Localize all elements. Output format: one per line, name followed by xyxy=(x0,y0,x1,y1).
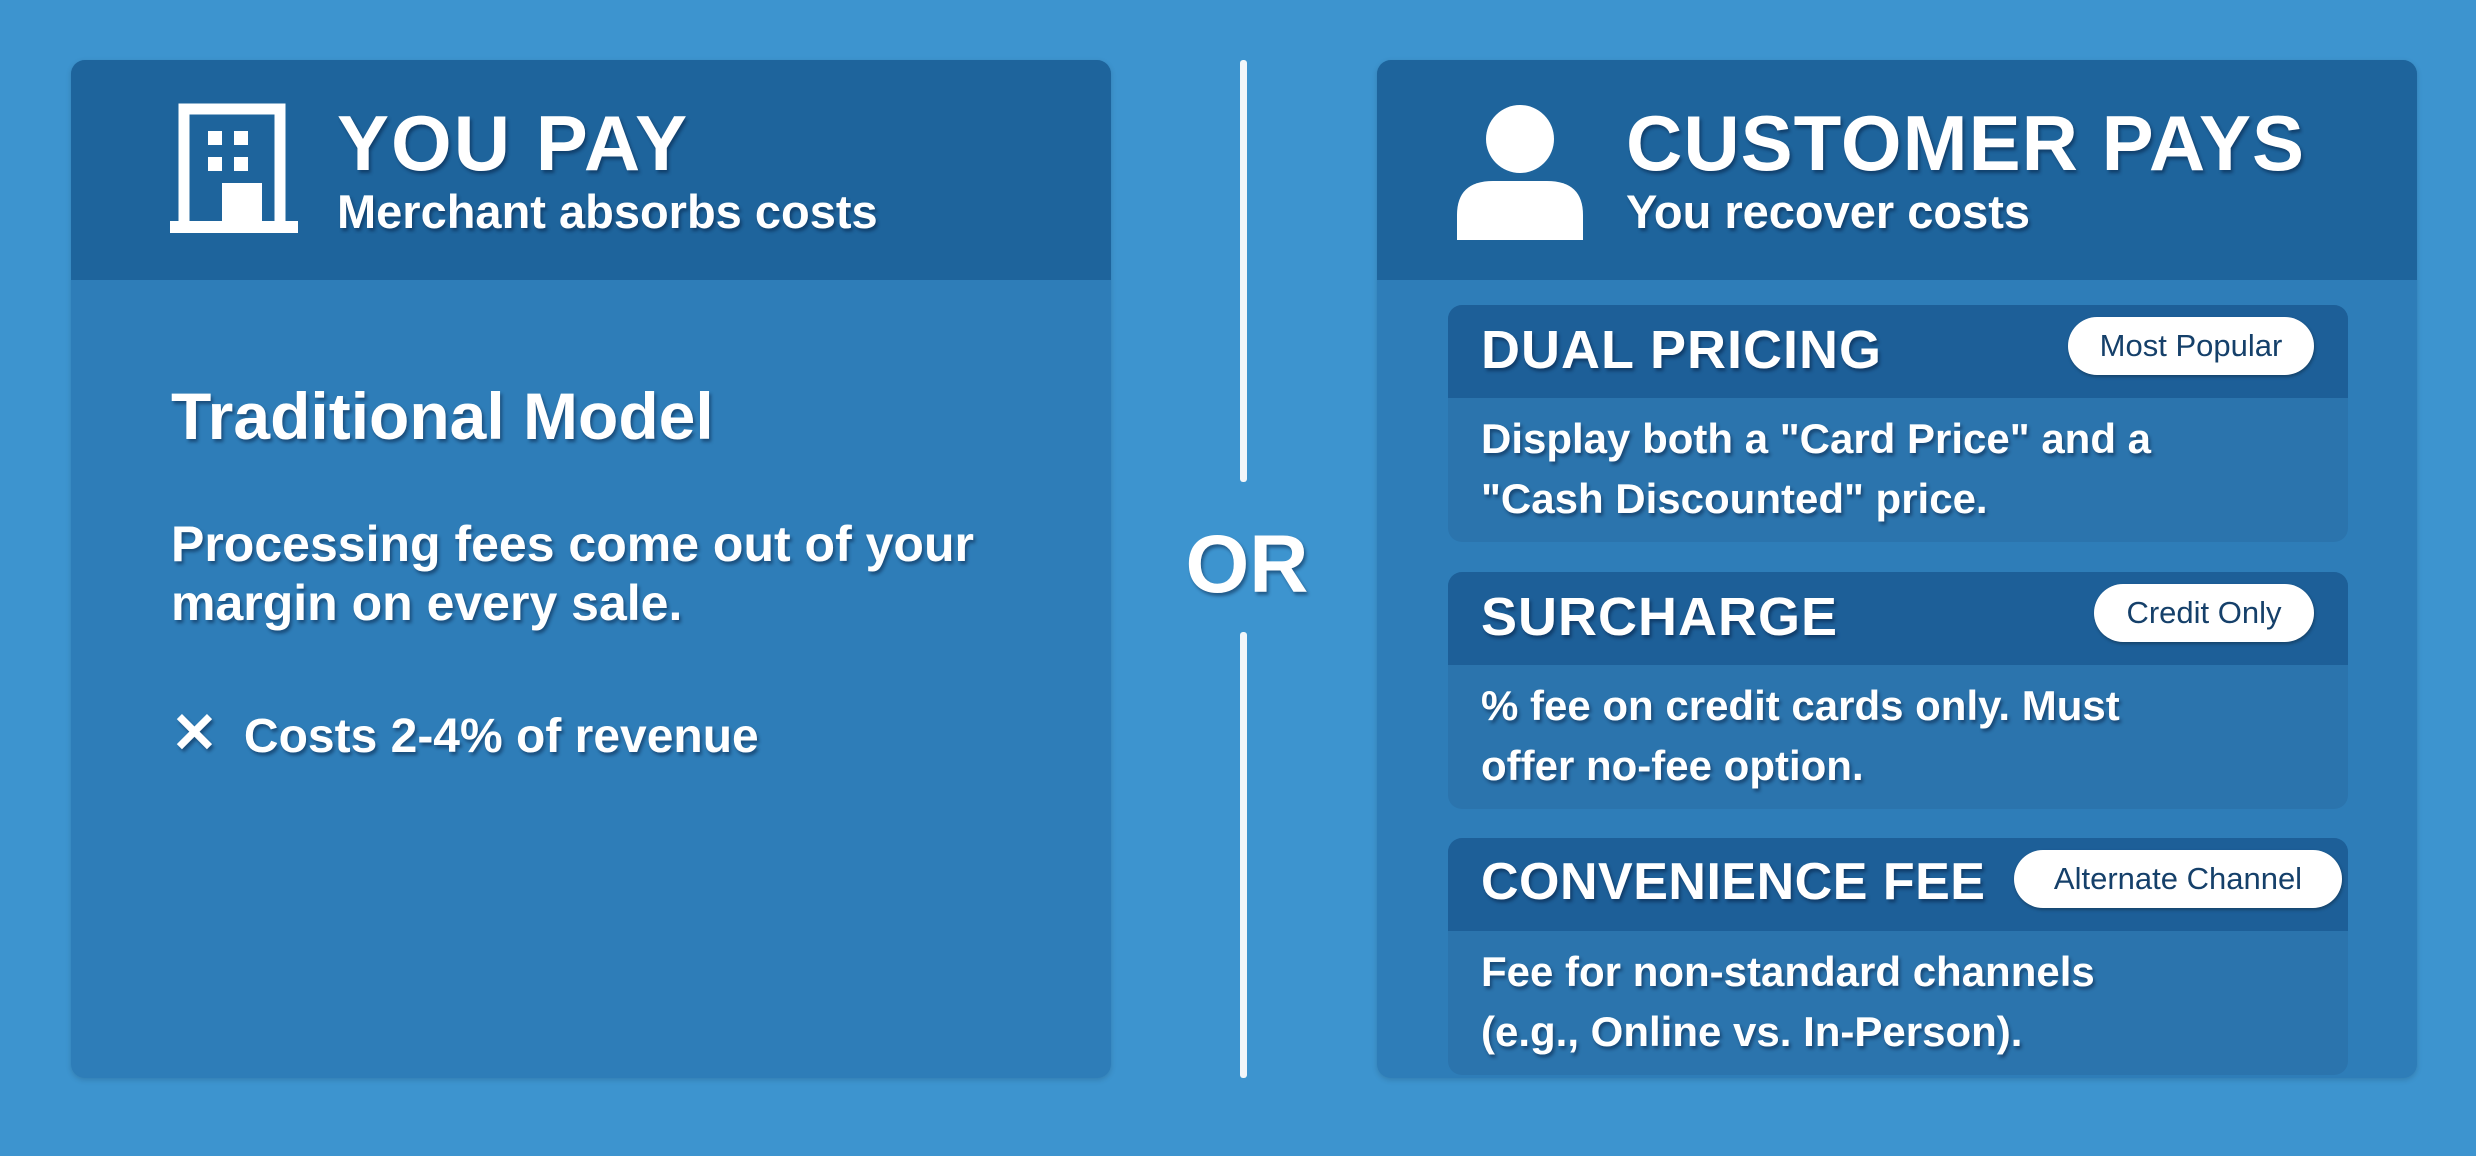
text: description: Processing fees come out of your xyxy=(171,516,974,572)
card text: Fee for non-standard channels xyxy=(1481,948,2095,995)
card text xyxy=(1481,415,2154,526)
card: surcharge xyxy=(1448,572,2348,809)
header: you pay xyxy=(71,60,1111,280)
badge: alternate channel: Alternate Channel xyxy=(2054,861,2302,896)
card title: SURCHARGE xyxy=(1481,587,1838,647)
subtitle: Merchant absorbs costs xyxy=(337,185,878,238)
header: customer pays xyxy=(1377,60,2417,280)
OR label: OR xyxy=(1186,519,1308,610)
card text: (e.g., Online vs. In-Person). xyxy=(1481,1008,2022,1055)
title: you pay: YOU PAY xyxy=(337,99,689,187)
text: cost note with x icon: ✕ Costs 2-4% of revenue xyxy=(171,701,759,764)
card: convenience fee xyxy=(1448,838,2348,1075)
panel: customer pays xyxy=(1377,60,2417,1078)
divider line top xyxy=(1240,60,1247,482)
title: customer pays: CUSTOMER PAYS xyxy=(1626,99,2305,187)
badge: alternate channel xyxy=(2014,850,2342,908)
card text: "Cash Discounted" price. xyxy=(1481,475,1988,522)
card text xyxy=(1481,948,2096,1059)
badge: credit only xyxy=(2094,584,2314,642)
icon: person xyxy=(1457,105,1583,240)
heading: traditional model: Traditional Model xyxy=(171,379,714,453)
badge: most popular: Most Popular xyxy=(2100,328,2282,363)
divider line bottom xyxy=(1240,632,1247,1078)
card title: CONVENIENCE FEE xyxy=(1481,853,1985,911)
subtitle: You recover costs xyxy=(1626,185,2030,238)
card: dual pricing xyxy=(1448,305,2348,542)
card text: % fee on credit cards only. Must xyxy=(1481,682,2120,729)
text: description: margin on every sale. xyxy=(171,575,682,631)
card text: offer no-fee option. xyxy=(1481,742,1864,789)
icon: building xyxy=(170,104,298,233)
badge: credit only: Credit Only xyxy=(2126,595,2282,630)
card text xyxy=(1481,682,2122,793)
text: description xyxy=(171,516,977,636)
badge: most popular xyxy=(2068,317,2314,375)
panel: you pay xyxy=(71,60,1111,1078)
card title: DUAL PRICING xyxy=(1481,320,1882,380)
card text: Display both a "Card Price" and a xyxy=(1481,415,2151,462)
